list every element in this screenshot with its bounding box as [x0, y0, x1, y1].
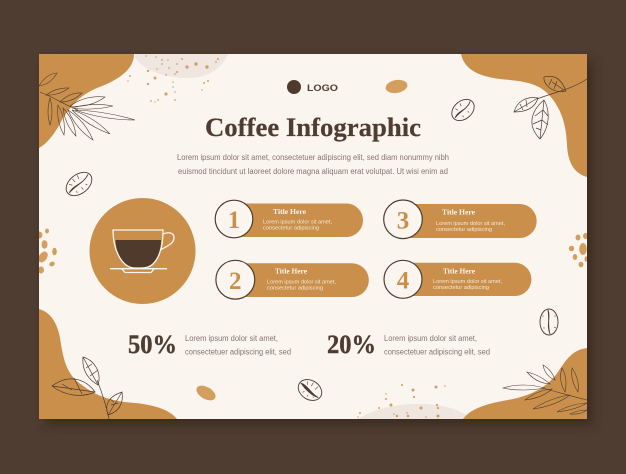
blob: bottom right — [463, 348, 587, 419]
dots: right edge — [569, 233, 588, 267]
item 4: Lorem ipsum dolor sit amet, — [433, 279, 503, 285]
item 1: 1 — [228, 207, 240, 234]
stat: 50%: 50% — [128, 330, 177, 359]
intro text: Lorem ipsum dolor sit amet, consectetuer adipiscing elit, sed diam nonummy nibh — [177, 153, 449, 162]
item 2: 2 — [229, 268, 242, 295]
item 2: Title Here — [275, 268, 307, 276]
stat: 50%: consectetuer adipiscing elit, sed — [185, 348, 291, 356]
item 4: consectetur adipiscing — [433, 285, 489, 291]
title: Coffee Infographic — [205, 112, 421, 142]
item 4: Title Here — [443, 268, 475, 276]
speckles: bottom — [357, 384, 446, 418]
item 4 — [384, 260, 531, 298]
stat: 20%: consectetuer adipiscing elit, sed — [384, 348, 490, 356]
stat: 20%: 20% — [327, 330, 376, 359]
decorative oval — [385, 78, 408, 95]
decorative oval bottom — [194, 383, 218, 403]
item 3 — [384, 200, 537, 239]
item 1 — [215, 200, 363, 238]
blob: top right — [461, 54, 587, 177]
item 4: 4 — [397, 268, 410, 294]
item 2: consectetur adipiscing — [267, 286, 323, 292]
item 1: Title Here — [273, 209, 306, 216]
icon: bean top left — [62, 168, 96, 200]
dots: left edge — [39, 228, 57, 274]
item 3: Lorem ipsum dolor sit amet, — [436, 221, 506, 227]
stat: 20%: Lorem ipsum dolor sit amet, — [384, 334, 477, 343]
leaves: bottom left branch — [52, 357, 122, 419]
blob: bottom left — [39, 309, 177, 419]
item 3: consectetur adipiscing — [436, 227, 492, 233]
icon: bean bottom centre — [294, 375, 326, 405]
logo — [287, 80, 338, 94]
icon: bean right — [540, 309, 558, 335]
item 2: Lorem ipsum dolor sit amet, — [267, 280, 337, 286]
item 1: Lorem ipsum dolor sit amet, — [263, 220, 333, 226]
speckles: top — [127, 55, 219, 103]
stat: 50%: Lorem ipsum dolor sit amet, — [185, 334, 278, 343]
intro text: euismod tincidunt ut laoreet dolore magna aliquam erat volutpat. Ut wisi enim ad — [178, 167, 448, 176]
leaves: bottom right palm — [503, 365, 587, 414]
intro text — [177, 153, 449, 176]
icon: coffee cup — [90, 198, 196, 304]
item 1: consectetur adipiscing — [263, 226, 319, 232]
logo: LOGO — [307, 83, 338, 94]
blob: bottom beige — [358, 404, 472, 419]
item 3: Title Here — [442, 210, 475, 216]
blob: top left — [39, 54, 134, 148]
stat: 20% — [327, 330, 490, 359]
icon: bean top right — [448, 95, 478, 125]
item 3: 3 — [397, 208, 409, 234]
stat: 50% — [128, 330, 291, 359]
leaves: top right branch — [514, 76, 587, 139]
panel: card — [36, 54, 588, 419]
item 2 — [216, 260, 369, 299]
leaves: top left palm — [39, 73, 135, 140]
blob: top beige — [134, 54, 228, 78]
